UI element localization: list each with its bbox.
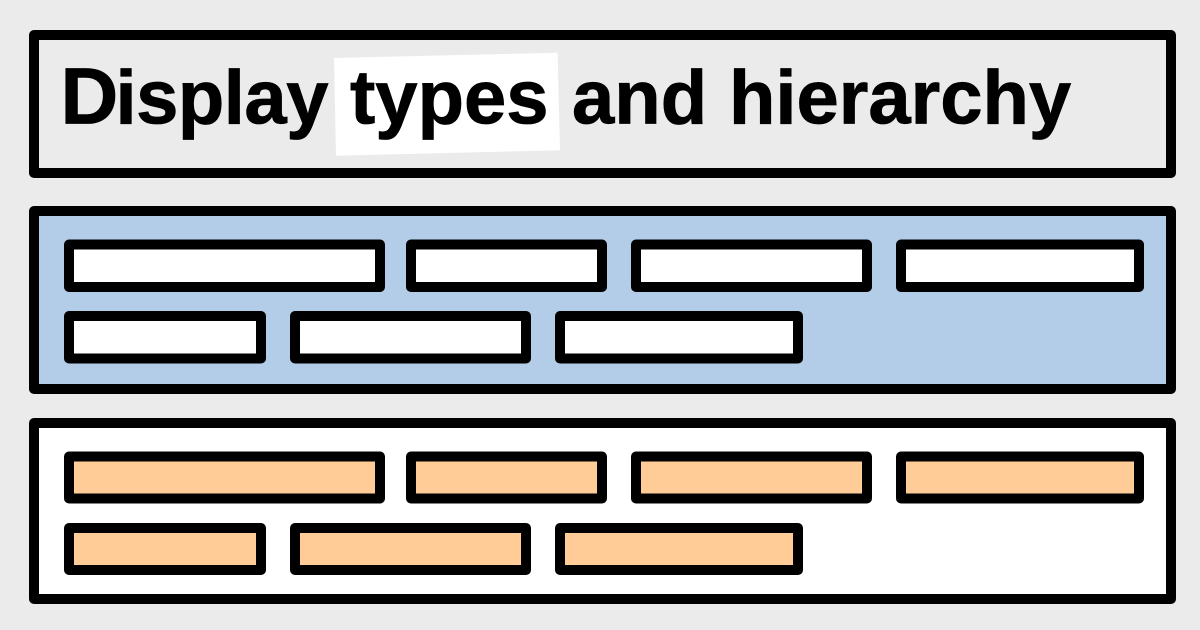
block: row 1 item 2 — [411, 456, 602, 498]
block: row 2 item 3 — [560, 528, 798, 570]
title heading: hierarchy — [729, 55, 1071, 140]
block: row 1 item 1 — [69, 244, 380, 287]
panel: white display group — [34, 423, 1171, 599]
block: row 1 item 4 — [901, 456, 1139, 498]
block: row 1 item 1 — [69, 456, 380, 498]
title panel — [34, 35, 1171, 173]
block: row 2 item 3 — [560, 316, 798, 358]
title heading: isplay — [116, 55, 328, 140]
block: row 1 item 3 — [636, 244, 867, 287]
block: row 2 item 2 — [295, 528, 526, 570]
block: row 2 item 1 — [69, 528, 261, 570]
highlight behind the word types — [334, 53, 560, 156]
panel: blue display group — [34, 211, 1171, 389]
title heading: and — [572, 55, 707, 140]
block: row 1 item 3 — [636, 456, 867, 498]
title heading: types — [350, 55, 549, 140]
block: row 1 item 4 — [901, 244, 1139, 287]
title heading — [60, 51, 1071, 140]
block: row 2 item 1 — [69, 316, 261, 358]
block: row 2 item 2 — [295, 316, 526, 358]
title heading: D — [60, 51, 118, 140]
block: row 1 item 2 — [411, 244, 602, 287]
